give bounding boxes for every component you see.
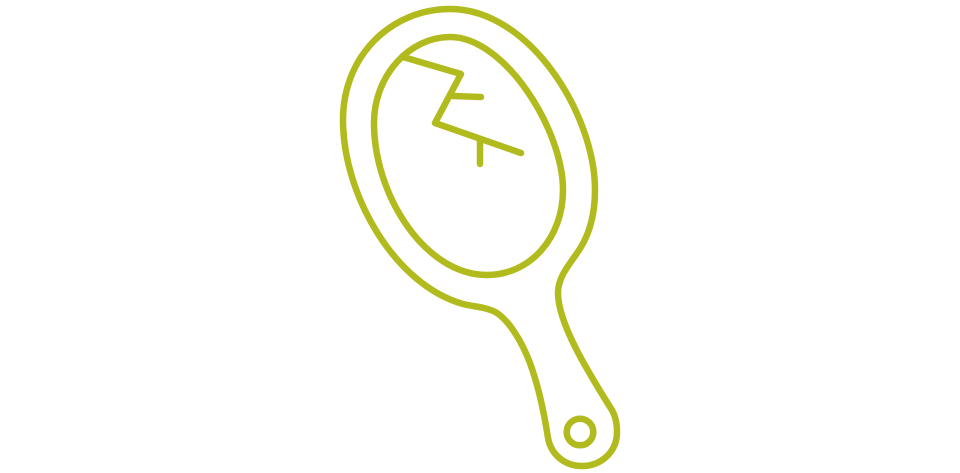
- mirror glass rim: [374, 37, 563, 275]
- handle hanging hole: [567, 419, 593, 445]
- crack lines: [403, 57, 521, 164]
- mirror frame and handle outline: [343, 9, 617, 466]
